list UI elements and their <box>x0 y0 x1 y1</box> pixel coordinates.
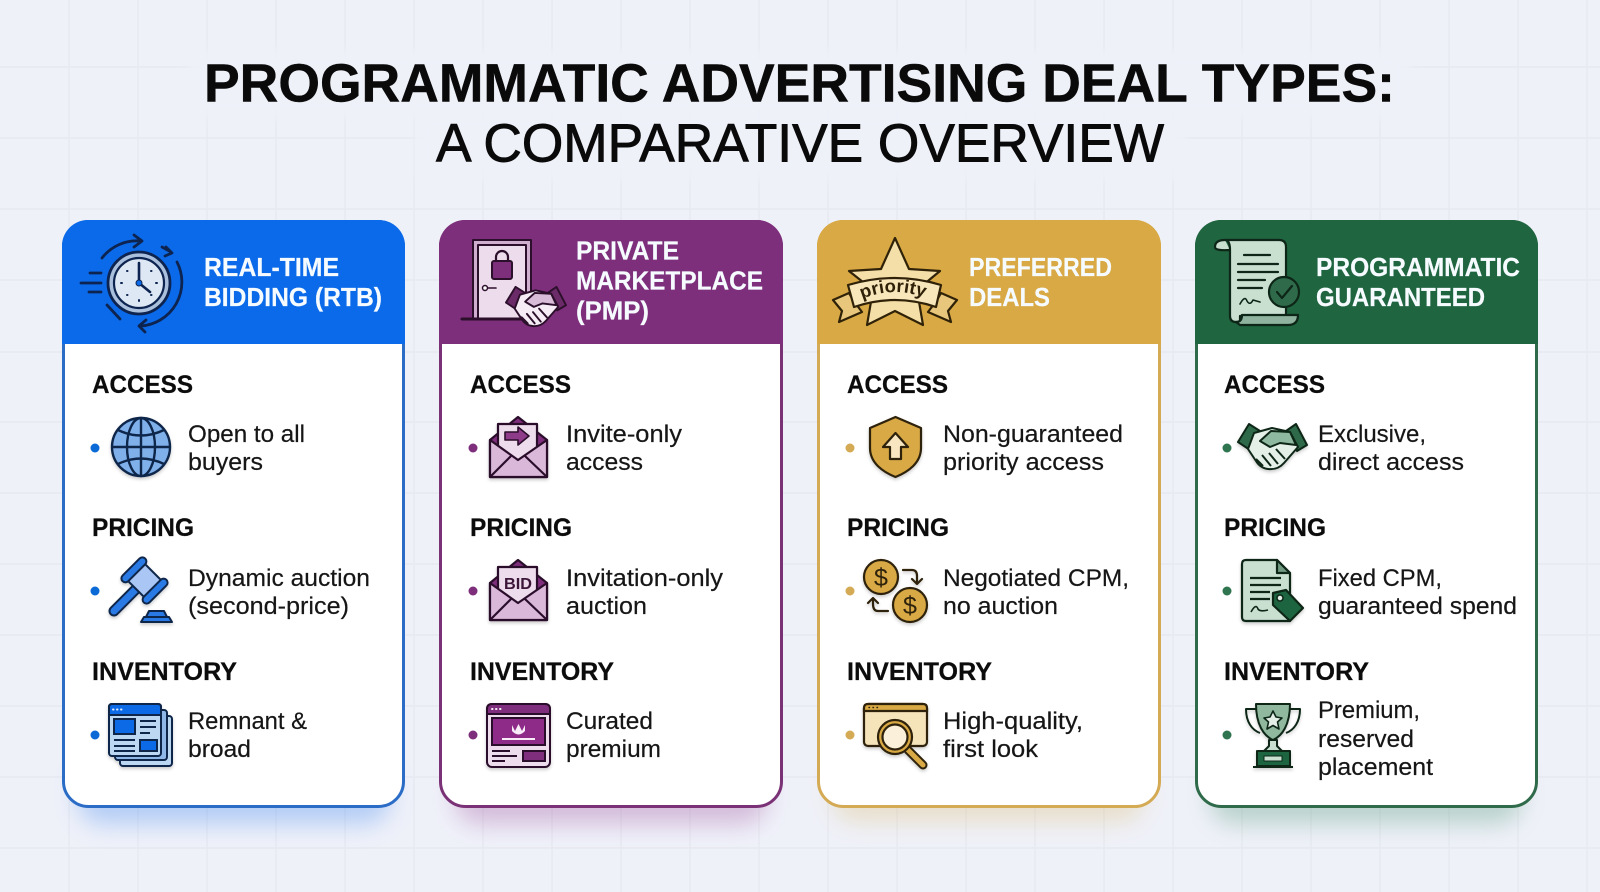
inventory text: premium <box>566 736 661 763</box>
bullet <box>1222 586 1232 596</box>
panel: real-time bidding <box>62 220 405 824</box>
icon: priority shield <box>870 417 921 477</box>
icon: priority star badge <box>832 236 958 326</box>
panel: preferred deals <box>817 220 1161 832</box>
access label: ACCESS <box>92 371 193 399</box>
pricing text: Dynamic auction <box>188 565 370 592</box>
bullet <box>1222 444 1232 452</box>
pricing text: guaranteed spend <box>1318 593 1517 620</box>
inventory text: Curated <box>566 708 653 735</box>
inventory text <box>188 708 307 763</box>
inventory text: Premium, <box>1318 697 1420 724</box>
title: A COMPARATIVE OVERVIEW <box>436 114 1164 174</box>
bullet <box>846 444 854 452</box>
inventory text: High-quality, <box>943 708 1083 735</box>
pricing text <box>943 565 1129 620</box>
pricing label: PRICING <box>1224 514 1326 542</box>
card heading <box>576 236 763 326</box>
card heading: GUARANTEED <box>1316 282 1485 312</box>
inventory text <box>943 708 1083 763</box>
access text: buyers <box>188 449 263 476</box>
inventory text: placement <box>1318 754 1433 781</box>
card heading <box>204 252 382 312</box>
card heading: PRIVATE <box>576 236 679 266</box>
pricing text <box>188 565 370 620</box>
icon: invitation envelope <box>490 417 547 477</box>
pricing text <box>566 565 723 620</box>
bullet <box>1222 730 1232 740</box>
inventory label: INVENTORY <box>1224 658 1369 686</box>
icon: bid envelope: BID <box>504 576 532 593</box>
access text <box>188 421 305 476</box>
pricing label: PRICING <box>847 514 949 542</box>
icon: bid envelope <box>490 560 547 620</box>
bullet <box>90 586 100 596</box>
inventory text: Remnant & <box>188 708 307 735</box>
access text: Non-guaranteed <box>943 421 1123 448</box>
bullet <box>90 730 100 740</box>
icon: contract scroll with seal <box>1215 240 1299 325</box>
bullet <box>468 730 478 740</box>
icon: newspaper stack <box>109 704 172 766</box>
inventory label: INVENTORY <box>847 658 992 686</box>
bullet <box>468 444 478 452</box>
card heading: MARKETPLACE <box>576 266 763 296</box>
icon: locked door and handshake <box>462 240 566 326</box>
card heading: (PMP) <box>576 296 649 326</box>
inventory label: INVENTORY <box>470 658 614 686</box>
icon: dollar coins exchange: $ <box>903 592 917 620</box>
access text: priority access <box>943 449 1104 476</box>
access text <box>566 421 682 476</box>
inventory text <box>566 708 661 763</box>
icon: curated ad window <box>487 704 550 767</box>
access text: Exclusive, <box>1318 421 1426 448</box>
card heading: PROGRAMMATIC <box>1316 252 1520 282</box>
pricing label: PRICING <box>92 514 194 542</box>
panel: private marketplace <box>439 220 783 824</box>
pricing text: Negotiated CPM, <box>943 565 1129 592</box>
access label: ACCESS <box>470 371 571 399</box>
icon: gavel <box>114 556 172 622</box>
icon: spinning clock <box>81 235 182 332</box>
card heading: REAL-TIME <box>204 252 339 282</box>
access label: ACCESS <box>1224 371 1325 399</box>
inventory text: first look <box>943 736 1039 763</box>
pricing text <box>1318 565 1517 620</box>
bullet <box>846 730 854 740</box>
inventory label: INVENTORY <box>92 658 237 686</box>
card heading: BIDDING (RTB) <box>204 282 382 312</box>
title <box>204 54 1395 174</box>
panel: programmatic guaranteed <box>1195 220 1538 824</box>
access text: direct access <box>1318 449 1464 476</box>
title: PROGRAMMATIC ADVERTISING DEAL TYPES: <box>204 54 1395 114</box>
bullet <box>468 586 478 596</box>
icon: dollar coins exchange: $ <box>874 564 888 592</box>
bullet <box>846 586 854 596</box>
card heading <box>1316 252 1520 312</box>
pricing text: no auction <box>943 593 1058 620</box>
access text: access <box>566 449 643 476</box>
pricing label: PRICING <box>470 514 572 542</box>
icon: globe <box>112 418 170 476</box>
bullet <box>90 444 100 452</box>
access text <box>943 421 1123 476</box>
inventory text <box>1318 697 1433 781</box>
inventory text: reserved <box>1318 726 1414 753</box>
card heading: PREFERRED <box>969 252 1112 282</box>
access text: Open to all <box>188 421 305 448</box>
icon: dollar coins exchange <box>864 560 927 622</box>
icon: trophy <box>1246 704 1300 767</box>
card heading <box>969 252 1112 312</box>
icon: priority star badge: priority <box>860 280 927 302</box>
icon: magnifier over window <box>864 704 927 765</box>
access text: Invite-only <box>566 421 682 448</box>
pricing text: Invitation-only <box>566 565 723 592</box>
icon: document with price tag <box>1242 560 1303 621</box>
pricing text: (second-price) <box>188 593 349 620</box>
pricing text: Fixed CPM, <box>1318 565 1442 592</box>
card heading: DEALS <box>969 282 1050 312</box>
access text <box>1318 421 1464 476</box>
icon: handshake <box>1238 424 1307 469</box>
pricing text: auction <box>566 593 647 620</box>
access label: ACCESS <box>847 371 948 399</box>
inventory text: broad <box>188 736 251 763</box>
